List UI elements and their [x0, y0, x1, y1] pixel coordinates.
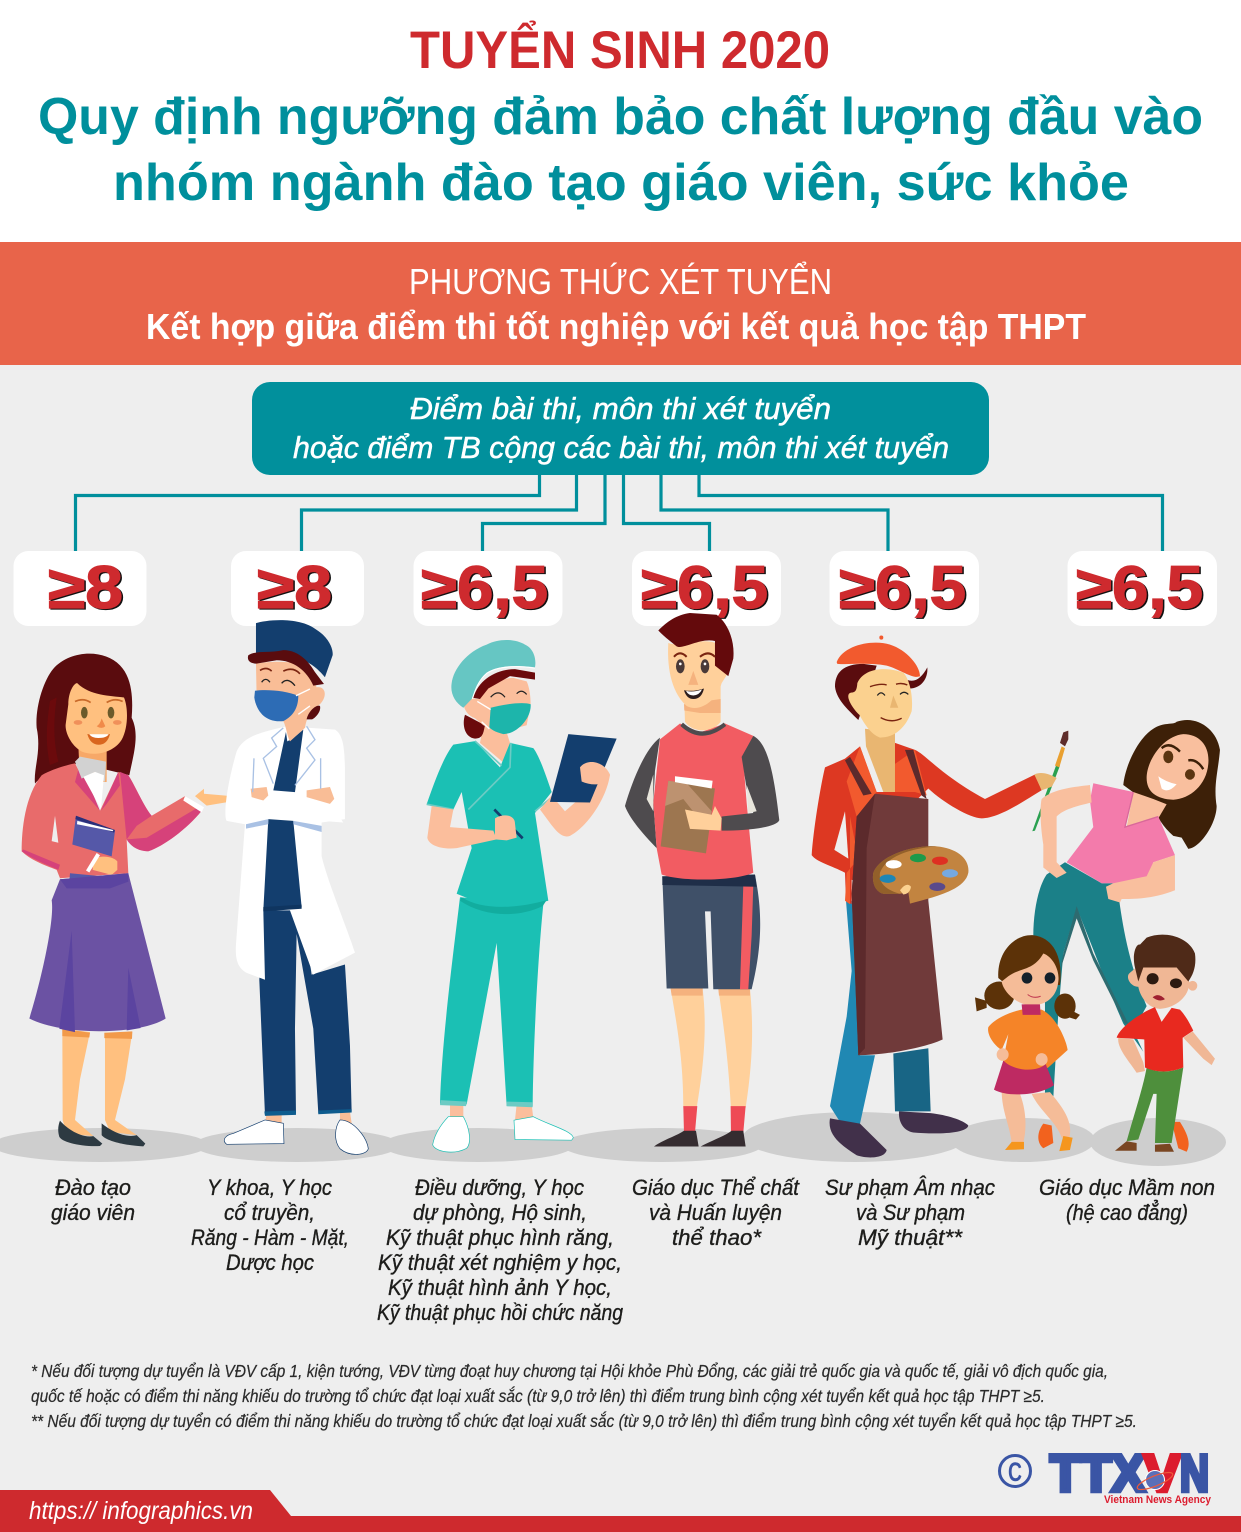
- title: [38, 20, 1203, 212]
- teal criteria box: [252, 382, 989, 475]
- teal criteria box: hoặc điểm TB cộng các bài thi, môn thi xét tuyển: [293, 430, 949, 465]
- logo: TTXVN: V: [1144, 1445, 1180, 1503]
- score box: thể chất: ≥6,5: [642, 555, 770, 622]
- score box: y khoa: ≥8: [257, 554, 332, 621]
- score box: điều dưỡng: [414, 551, 562, 626]
- label: sư phạm âm nhạc: Sư phạm Âm nhạc: [825, 1175, 995, 1200]
- logo: TTXVN: C: [1008, 1457, 1022, 1487]
- logo: TTXVN: TTX: [1050, 1445, 1145, 1503]
- score box: âm nhạc mỹ thuật: ≥6,5: [840, 555, 968, 622]
- header background: [0, 0, 1241, 242]
- label: điều dưỡng: Kỹ thuật xét nghiệm y học,: [378, 1250, 622, 1275]
- figure: painter: [812, 635, 1068, 1157]
- label: giáo dục thể chất: và Huấn luyện: [649, 1200, 782, 1225]
- label: sư phạm âm nhạc: [825, 1175, 995, 1250]
- label: điều dưỡng: Kỹ thuật phục hình răng,: [386, 1225, 614, 1250]
- score box: âm nhạc mỹ thuật: ≥6,5: [839, 554, 966, 621]
- score box: mầm non: ≥6,5: [1078, 555, 1204, 622]
- score box: điều dưỡng: ≥6,5: [421, 554, 548, 621]
- title: Quy định ngưỡng đảm bảo chất lượng đầu vào: [38, 88, 1203, 146]
- label: y khoa: Dược học: [226, 1250, 314, 1275]
- score box: y khoa: ≥8: [258, 555, 334, 622]
- label: giáo dục mầm non: [1039, 1175, 1215, 1225]
- figure: boy: [1115, 935, 1215, 1152]
- figure: mother: [1033, 720, 1220, 1152]
- score box: điều dưỡng: ≥6,5: [422, 555, 550, 622]
- label: giáo dục thể chất: [632, 1175, 800, 1250]
- score box: giáo viên: ≥8: [50, 555, 124, 622]
- label: đào tạo giáo viên: [51, 1175, 135, 1225]
- footer bar with url: [0, 1490, 1241, 1532]
- connector lines: [76, 474, 1162, 552]
- label: giáo dục thể chất: thể thao*: [672, 1225, 762, 1250]
- score box: thể chất: ≥6,5: [641, 554, 768, 621]
- teal criteria box: Điểm bài thi, môn thi xét tuyển: [410, 391, 831, 426]
- score box: thể chất: [632, 551, 781, 626]
- logo: TTXVN: [1000, 1445, 1212, 1506]
- score box: mầm non: ≥6,5: [1076, 554, 1203, 621]
- label: y khoa: [191, 1175, 349, 1275]
- label: điều dưỡng: dự phòng, Hộ sinh,: [413, 1200, 587, 1225]
- title: TUYỂN SINH 2020: [410, 20, 830, 80]
- footnotes: [31, 1361, 1137, 1431]
- figure: girl: [975, 935, 1080, 1151]
- footnotes: quốc tế hoặc có điểm thi năng khiếu do trường tổ chức đạt loại xuất sắc (từ 9,0 trở lên) thì điểm trung bình cộng xét tuyển kết quả học tập THPT ≥5.: [31, 1386, 1045, 1406]
- label: điều dưỡng: [377, 1175, 624, 1325]
- score box: y khoa: [231, 551, 364, 626]
- label: đào tạo giáo viên: Đào tạo: [55, 1175, 131, 1200]
- logo: TTXVN: Vietnam News Agency: [1104, 1494, 1212, 1506]
- label: giáo dục mầm non: Giáo dục Mầm non: [1039, 1175, 1215, 1200]
- label: điều dưỡng: Kỹ thuật phục hồi chức năng: [377, 1300, 624, 1325]
- label: điều dưỡng: Điều dưỡng, Y học: [415, 1175, 584, 1200]
- label: sư phạm âm nhạc: Mỹ thuật**: [858, 1225, 963, 1250]
- label: y khoa: Răng - Hàm - Mặt,: [191, 1225, 349, 1250]
- figure: athlete: [625, 613, 779, 1146]
- title: nhóm ngành đào tạo giáo viên, sức khỏe: [113, 154, 1129, 212]
- label: sư phạm âm nhạc: và Sư phạm: [856, 1200, 965, 1225]
- ground shadows: [0, 1112, 1226, 1166]
- score box: mầm non: [1068, 551, 1217, 626]
- figure: teacher: [22, 654, 232, 1146]
- banner: phương thức xét tuyển: PHƯƠNG THỨC XÉT TUYỂN: [409, 260, 832, 302]
- label: điều dưỡng: Kỹ thuật hình ảnh Y học,: [388, 1275, 612, 1300]
- label: giáo dục thể chất: Giáo dục Thể chất: [632, 1175, 800, 1200]
- score box: âm nhạc mỹ thuật: [830, 551, 979, 626]
- label: đào tạo giáo viên: giáo viên: [51, 1200, 135, 1225]
- footer bar with url: https:// infographics.vn: [29, 1497, 253, 1525]
- logo: TTXVN: N: [1180, 1445, 1209, 1503]
- figure: nurse: [427, 640, 617, 1152]
- figure: doctor: [224, 620, 368, 1154]
- banner: phương thức xét tuyển: [0, 242, 1241, 365]
- label: y khoa: cổ truyền,: [224, 1200, 315, 1225]
- score box: giáo viên: [14, 551, 146, 626]
- score box: giáo viên: ≥8: [48, 554, 123, 621]
- label: giáo dục mầm non: (hệ cao đẳng): [1066, 1200, 1188, 1225]
- banner: phương thức xét tuyển: Kết hợp giữa điểm thi tốt nghiệp với kết quả học tập THPT: [146, 306, 1086, 347]
- footnotes: * Nếu đối tượng dự tuyển là VĐV cấp 1, kiện tướng, VĐV từng đoạt huy chương tại Hội khỏe Phù Đổng, các giải trẻ quốc gia và quốc tế, giải vô địch quốc gia,: [31, 1361, 1108, 1381]
- label: y khoa: Y khoa, Y học: [207, 1175, 332, 1200]
